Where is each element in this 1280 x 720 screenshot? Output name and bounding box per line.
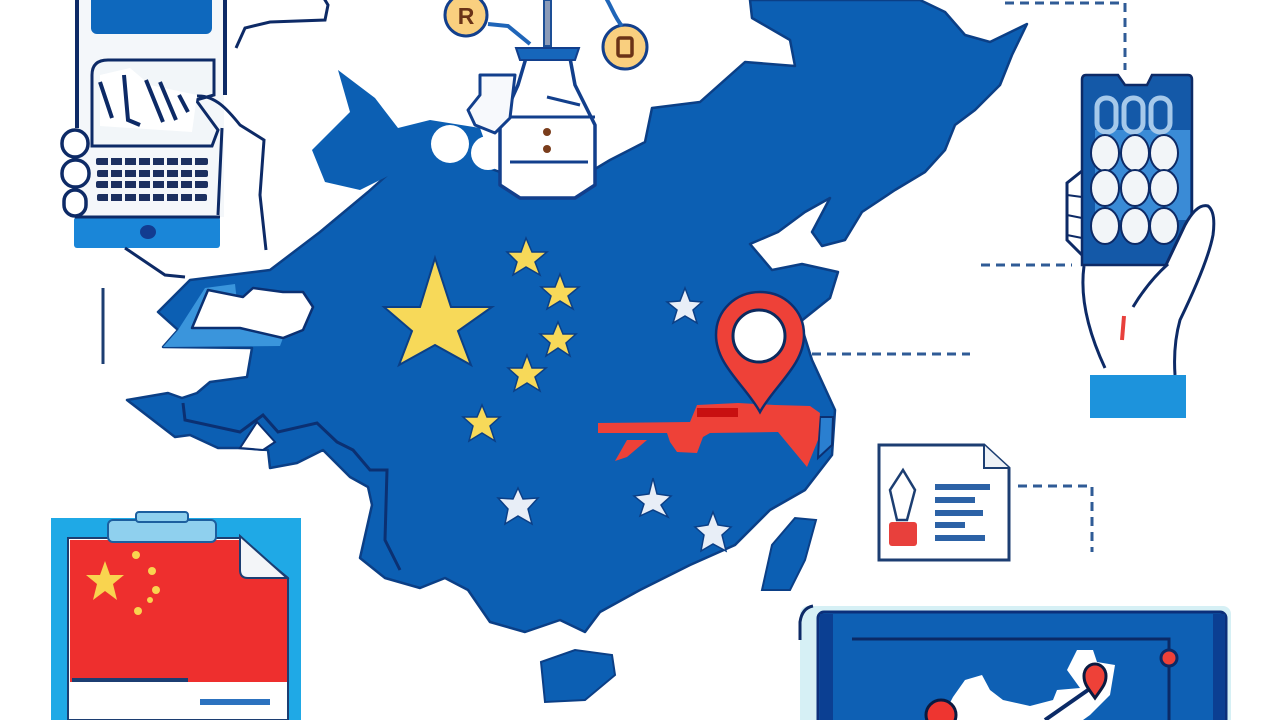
inner western outline xyxy=(183,403,400,570)
northwest lobe xyxy=(312,70,495,190)
icon: monitor with map xyxy=(800,606,1231,720)
thumb and wrist xyxy=(125,0,328,277)
island: Hainan xyxy=(541,650,615,702)
island: Taiwan xyxy=(762,518,816,590)
coin square xyxy=(603,25,647,69)
white circles north xyxy=(431,125,469,163)
vertical line left xyxy=(102,288,104,364)
monitor mini map xyxy=(941,650,1115,720)
map of China xyxy=(127,0,1027,632)
thumb xyxy=(1166,206,1214,375)
white spot southwest xyxy=(240,422,275,450)
red location pin and region xyxy=(598,292,833,467)
icon: lab flask with coins xyxy=(445,0,647,198)
icon: hand holding phone xyxy=(1067,75,1214,418)
dashed connectors xyxy=(812,3,1125,552)
icon: document card xyxy=(879,445,1009,560)
coin R xyxy=(445,0,487,36)
fingers xyxy=(62,130,89,216)
large yellow star xyxy=(384,258,492,365)
keyboard xyxy=(96,158,208,201)
light band by western lake xyxy=(163,284,283,347)
white lake west xyxy=(192,288,313,338)
small yellow stars xyxy=(463,238,579,441)
faded white stars xyxy=(498,288,731,551)
icon: tablet with hand, top left xyxy=(62,0,328,277)
icon: clipboard with flag xyxy=(51,512,301,720)
beaker xyxy=(468,75,515,133)
icon: lab flask with coins: R xyxy=(458,3,475,29)
